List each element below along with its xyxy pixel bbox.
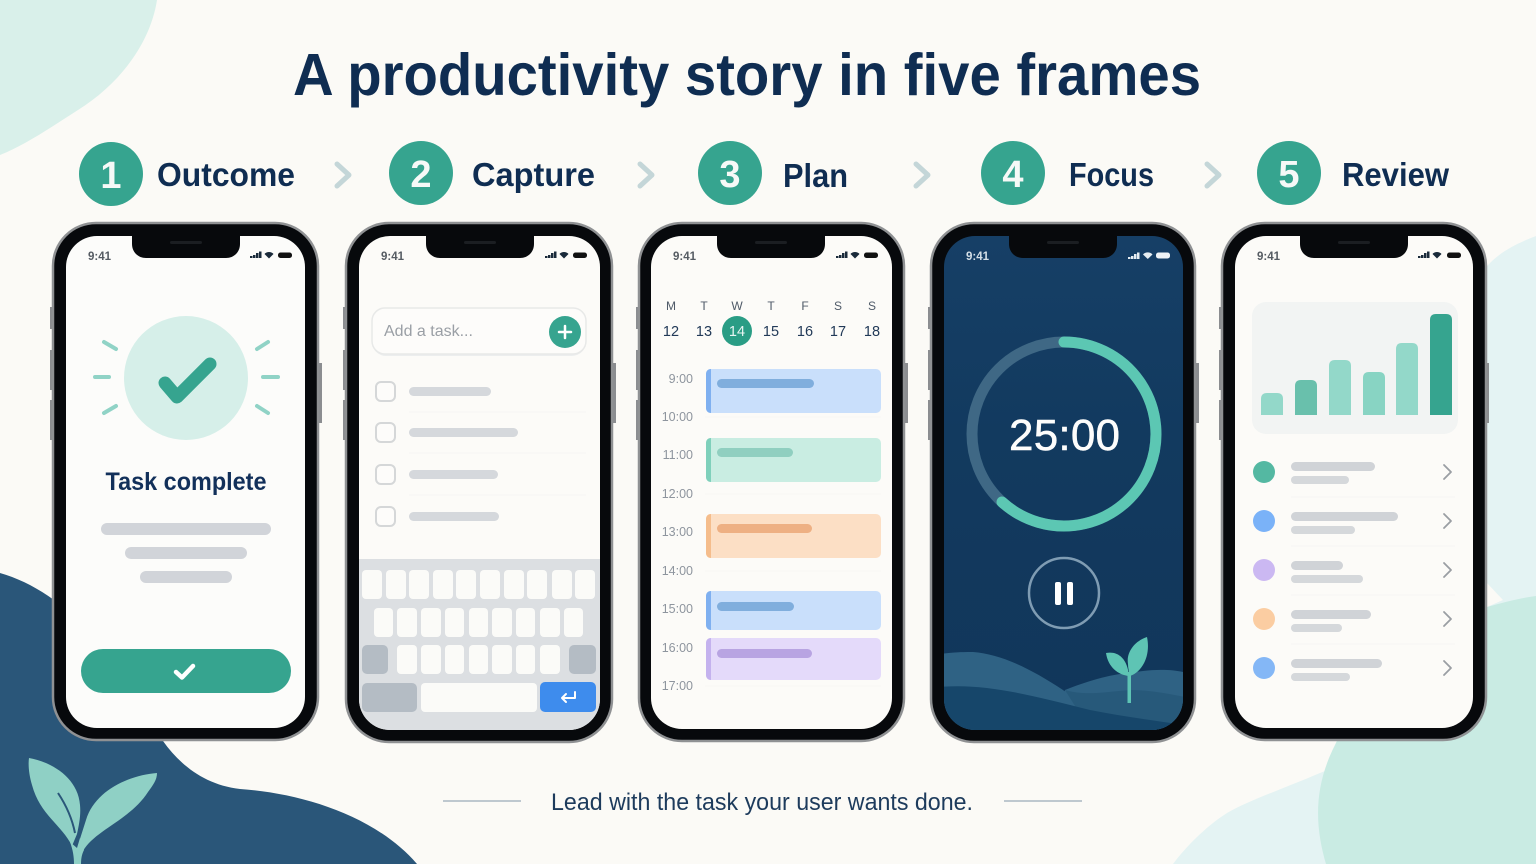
step 1: Outcome: 1: [100, 155, 122, 197]
heading: Task complete: Task complete: [106, 468, 267, 496]
step 4: Focus: Focus: [1069, 156, 1154, 193]
week strip: [663, 299, 880, 346]
background blob: top-left mint: [0, 0, 157, 155]
status bar: [966, 251, 1170, 263]
status bar: 9:41: [381, 251, 405, 263]
step 2: Capture: 2: [410, 154, 432, 196]
week strip: T: [767, 299, 775, 313]
icon: sprout: [1106, 637, 1148, 703]
icon: decorative sprout: [29, 758, 157, 864]
timer ring: 25:00: [1009, 411, 1120, 460]
phone 1: Outcome: [50, 223, 322, 740]
button: pause: [1029, 558, 1099, 628]
landscape hills: [940, 652, 1185, 732]
calendar events: [706, 369, 881, 680]
arrow: step 3 to 4: [916, 164, 928, 186]
step 5: Review: Review: [1342, 156, 1449, 193]
schedule hours: 11:00: [663, 448, 693, 462]
step 2: Capture: [389, 141, 595, 205]
schedule hours: 14:00: [662, 564, 693, 578]
week strip: 18: [864, 324, 880, 340]
status bar: 9:41: [1257, 251, 1281, 263]
week strip: T: [700, 299, 708, 313]
week strip: W: [731, 299, 743, 313]
schedule hours: 16:00: [662, 641, 693, 655]
schedule hours: 10:00: [662, 410, 693, 424]
schedule hours: 12:00: [662, 487, 693, 501]
arrow: step 1 to 2: [337, 164, 349, 186]
step 1: Outcome: Outcome: [157, 156, 295, 193]
phone 4: Focus: [928, 223, 1199, 742]
week strip: S: [868, 299, 876, 313]
step 5: Review: 5: [1278, 154, 1300, 196]
phone 3: Plan: [636, 223, 908, 741]
step 2: Capture: Capture: [472, 156, 595, 193]
keyboard: [359, 559, 600, 730]
step 1: Outcome: [79, 142, 295, 206]
step 5: Review: [1257, 141, 1449, 205]
phone 2: Capture: [343, 223, 616, 742]
step 3: Plan: 3: [719, 154, 741, 196]
button: confirm: [81, 649, 291, 693]
step 3: Plan: [698, 141, 848, 205]
status bar: [1257, 251, 1461, 263]
caption: Lead with the task your user wants done.: [551, 789, 973, 816]
background blob: bottom-right mint: [1318, 596, 1536, 864]
week strip: S: [834, 299, 842, 313]
week strip: F: [801, 299, 809, 313]
status bar: 9:41: [673, 251, 697, 263]
status bar: [88, 251, 292, 263]
week strip: 12: [663, 324, 679, 340]
title: A productivity story in five frames: [293, 42, 1201, 108]
input: add a task: Add a task...: [384, 323, 473, 340]
status bar: [673, 251, 878, 263]
placeholder text lines: [101, 523, 271, 583]
week strip: 14: [729, 324, 745, 340]
step 4: Focus: [981, 141, 1154, 205]
background blob: bottom-left navy: [0, 573, 417, 864]
status bar: 9:41: [88, 251, 112, 263]
schedule hours: 15:00: [662, 602, 693, 616]
timer ring: [972, 342, 1156, 526]
step 3: Plan: Plan: [783, 157, 848, 194]
icon: success check: [95, 316, 278, 440]
status bar: [381, 251, 587, 263]
schedule hours: 13:00: [662, 525, 693, 539]
week strip: 13: [696, 324, 712, 340]
step 4: Focus: 4: [1002, 154, 1024, 196]
week strip: 16: [797, 324, 813, 340]
schedule hours: 17:00: [662, 679, 693, 693]
schedule hours: [662, 372, 881, 693]
arrow: step 2 to 3: [640, 164, 652, 186]
status bar: 9:41: [966, 251, 990, 263]
arrow: step 4 to 5: [1207, 164, 1219, 186]
background blob: right pale blue: [1173, 236, 1536, 864]
schedule hours: 9:00: [669, 372, 693, 386]
task checklist: [376, 382, 586, 526]
bar chart: [1252, 302, 1458, 434]
week strip: M: [666, 299, 676, 313]
input: add a task: [372, 308, 586, 356]
review list: [1253, 461, 1455, 681]
week strip: 17: [830, 324, 846, 340]
phone 5: Review: [1219, 223, 1489, 740]
week strip: 15: [763, 324, 779, 340]
